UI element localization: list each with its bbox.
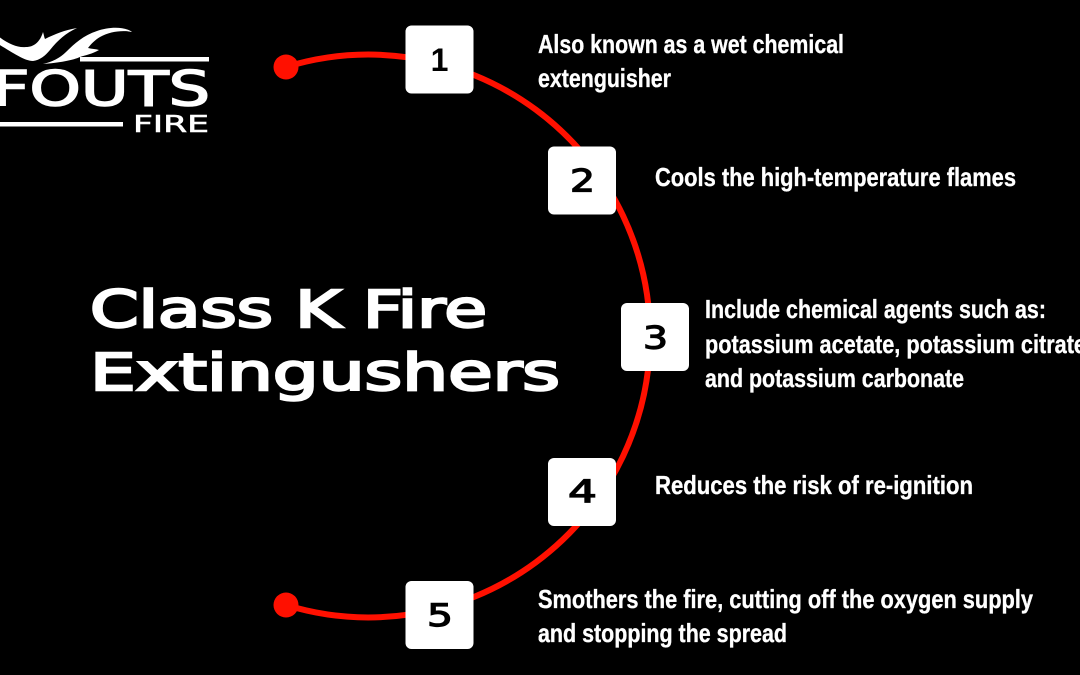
step 1 badge: [406, 26, 474, 94]
logo: Fouts Fire: FIRE: [133, 112, 209, 138]
title: Class K Fire: [90, 281, 487, 340]
title: [90, 281, 560, 403]
logo: Fouts Fire: [0, 28, 210, 138]
step 2 badge: 2: [570, 164, 595, 200]
step 2 badge: [548, 146, 616, 214]
step 5 badge: [406, 581, 474, 649]
step 3 badge: 3: [643, 320, 668, 356]
step 1 text: Also known as a wet chemical: [538, 29, 844, 59]
red arc timeline: [274, 54, 650, 618]
step 2 text: Cools the high-temperature flames: [655, 162, 1016, 192]
step 3 text: [705, 294, 1080, 393]
step 4 badge: 4: [568, 474, 597, 510]
step 1 badge: 1: [431, 42, 448, 78]
step 3 badge: [621, 303, 689, 371]
step 4 badge: [548, 458, 616, 526]
step 5 text: [538, 584, 1033, 648]
step 4 text: Reduces the risk of re-ignition: [655, 470, 973, 500]
step 1 text: extenguisher: [538, 63, 671, 93]
step 1 text: [538, 29, 844, 93]
step 5 text: and stopping the spread: [538, 618, 787, 648]
step 3 text: and potassium carbonate: [705, 363, 964, 393]
step 5 badge: 5: [427, 598, 453, 634]
title: Extingushers: [90, 344, 560, 403]
